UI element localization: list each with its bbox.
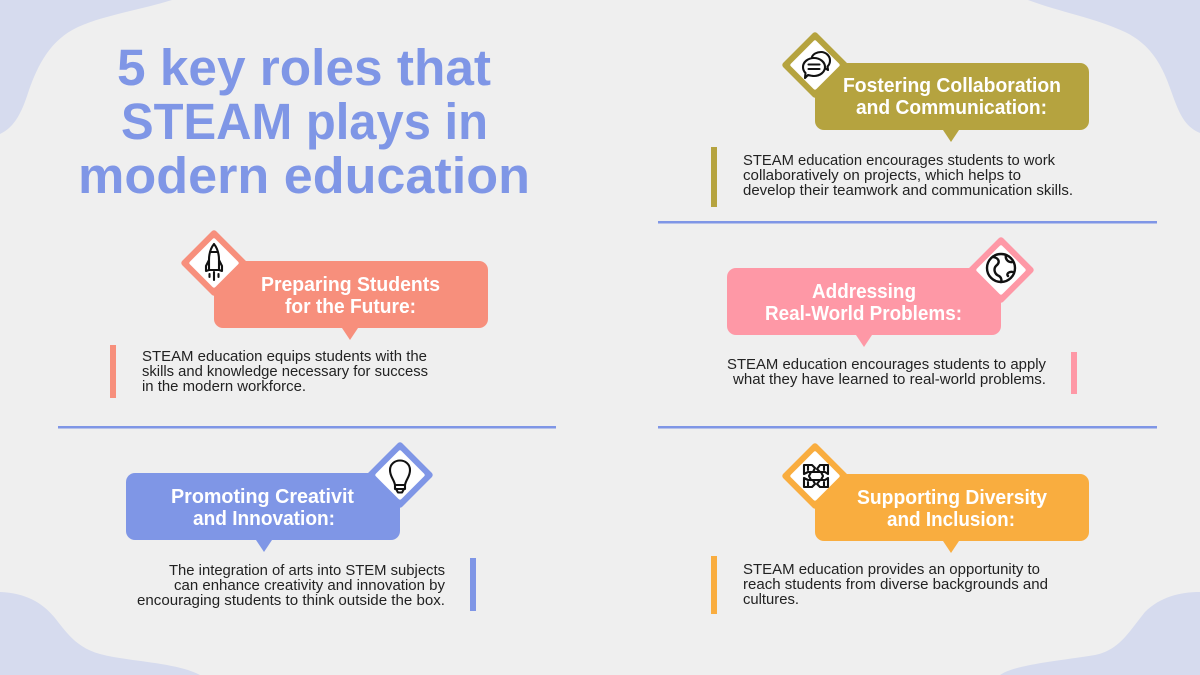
description: develop their teamwork and communication skills. xyxy=(743,182,1073,199)
description xyxy=(743,152,1073,199)
banner: promoting creativity: Promoting Creativit xyxy=(171,486,354,508)
title xyxy=(78,39,530,204)
description xyxy=(137,562,445,609)
description: in the modern workforce. xyxy=(142,378,306,395)
description: skills and knowledge necessary for success xyxy=(142,363,428,380)
accent bar xyxy=(711,147,717,207)
description: STEAM education encourages students to work xyxy=(743,152,1055,169)
banner: preparing students: for the Future: xyxy=(285,296,416,318)
title: STEAM plays in xyxy=(121,93,488,150)
panel: fostering collaboration xyxy=(711,31,1089,207)
icon: globe xyxy=(967,236,1035,304)
description: can enhance creativity and innovation by xyxy=(174,577,445,594)
description xyxy=(142,348,428,395)
title: modern education xyxy=(78,147,530,204)
description xyxy=(743,561,1048,608)
description: STEAM education encourages students to apply xyxy=(727,356,1046,373)
description: STEAM education equips students with the xyxy=(142,348,427,365)
icon: rocket xyxy=(180,229,248,297)
accent bar xyxy=(470,558,476,611)
accent bar xyxy=(110,345,116,398)
banner: supporting diversity: and Inclusion: xyxy=(887,509,1015,531)
accent bar xyxy=(1071,352,1077,394)
icon: speech bubbles xyxy=(781,31,849,99)
description: cultures. xyxy=(743,591,799,608)
description: The integration of arts into STEM subjects xyxy=(169,562,445,579)
banner: addressing real-world problems: Real-World Problems: xyxy=(765,303,962,325)
panel: supporting diversity xyxy=(711,442,1089,614)
banner: promoting creativity xyxy=(126,473,400,552)
icon: joined hands xyxy=(781,442,849,510)
description: reach students from diverse backgrounds and xyxy=(743,576,1048,593)
accent bar xyxy=(711,556,717,614)
description: what they have learned to real-world problems. xyxy=(732,371,1046,388)
banner: preparing students xyxy=(214,261,488,340)
banner: supporting diversity: Supporting Diversity xyxy=(857,487,1048,509)
banner: addressing real-world problems xyxy=(727,268,1001,347)
description xyxy=(727,356,1046,388)
banner: fostering collaboration xyxy=(815,63,1089,142)
description: STEAM education provides an opportunity to xyxy=(743,561,1040,578)
icon: light bulb xyxy=(366,441,434,509)
banner: fostering collaboration: and Communication: xyxy=(856,97,1047,119)
banner: addressing real-world problems: Addressing xyxy=(812,281,916,303)
title: 5 key roles that xyxy=(117,39,491,96)
banner: preparing students: Preparing Students xyxy=(261,274,440,296)
banner: fostering collaboration: Fostering Collaboration xyxy=(843,75,1061,97)
banner: supporting diversity xyxy=(815,474,1089,553)
description: collaboratively on projects, which helps to xyxy=(743,167,1021,184)
panel: preparing students xyxy=(110,229,488,398)
banner: promoting creativity: and Innovation: xyxy=(193,508,335,530)
description: encouraging students to think outside the box. xyxy=(137,592,445,609)
panel: promoting creativity xyxy=(126,441,476,611)
panel: addressing real-world problems xyxy=(727,236,1077,394)
